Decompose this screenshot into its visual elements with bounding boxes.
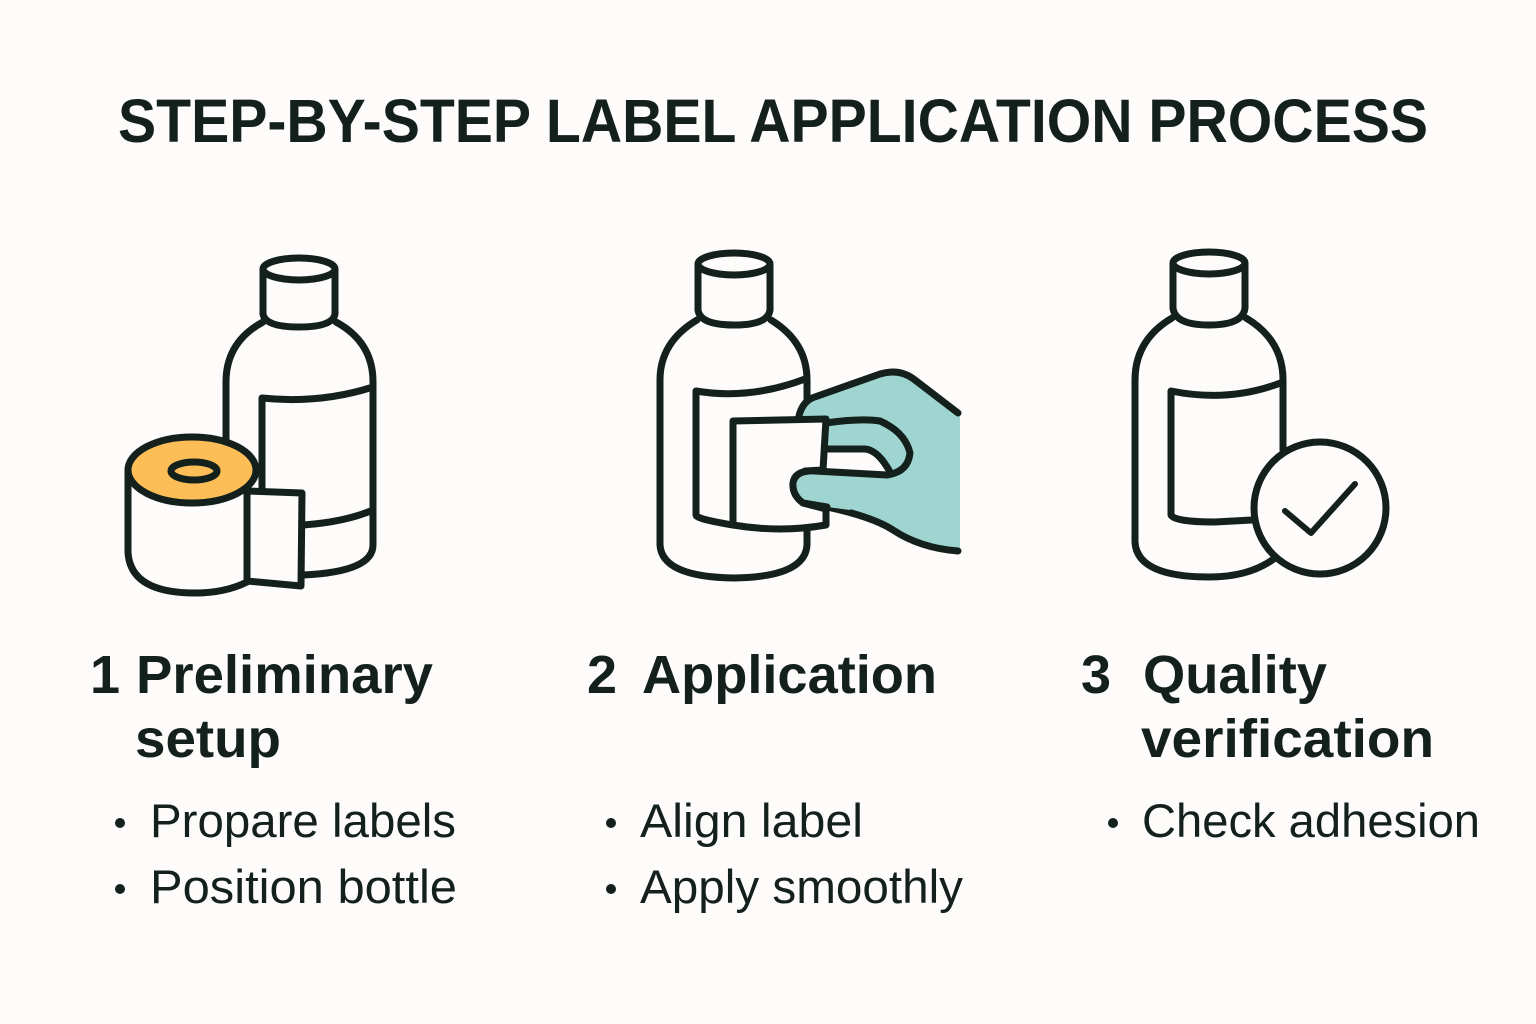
- gap between finger and thumb: [823, 448, 891, 472]
- bottle body: [660, 320, 807, 578]
- step 2 heading: Application: [642, 645, 937, 705]
- check badge: [1254, 442, 1386, 574]
- bottle body: [1135, 318, 1283, 577]
- bottle cap and neck: [1173, 252, 1245, 325]
- step 3 heading: 3: [1081, 645, 1111, 705]
- step 1 heading: 1: [90, 645, 120, 705]
- label roll: [128, 470, 247, 593]
- bottle label: [1171, 382, 1283, 522]
- step 1 bullets: Propare labels: [150, 794, 456, 847]
- bottle body: [226, 322, 373, 575]
- step 3 heading: verification: [1141, 709, 1434, 769]
- step 1 bullets: [115, 794, 457, 913]
- step 2 heading: 2: [587, 645, 617, 705]
- step 1 bullets: Position bottle: [150, 860, 457, 913]
- icon: step 2 hand applying label: [660, 253, 960, 578]
- hand outline: [799, 372, 958, 551]
- step 2 bullets: [606, 794, 963, 913]
- step 3 bullets: Check adhesion: [1142, 794, 1480, 847]
- step 3 heading: [1081, 645, 1434, 769]
- step 2 bullets: Align label: [640, 794, 863, 847]
- bottle cap and neck: [698, 253, 770, 325]
- thumb: [793, 471, 887, 510]
- icon: step 3 bottle with check mark: [1135, 252, 1386, 577]
- bottle label: [262, 387, 373, 525]
- step 3 heading: Quality: [1143, 645, 1327, 705]
- hand: [799, 372, 960, 552]
- loose label flap: [247, 491, 302, 586]
- step 1 heading: Preliminary: [136, 645, 433, 705]
- title: STEP-BY-STEP LABEL APPLICATION PROCESS: [118, 87, 1428, 155]
- step 2 bullets: Apply smoothly: [640, 860, 963, 913]
- bottle cap and neck: [263, 258, 335, 327]
- step 1 heading: [90, 645, 433, 769]
- applied label: [733, 419, 826, 529]
- step 1 heading: setup: [135, 709, 281, 769]
- bottle label: [696, 379, 805, 525]
- icon: step 1 bottle and label roll: [128, 258, 373, 593]
